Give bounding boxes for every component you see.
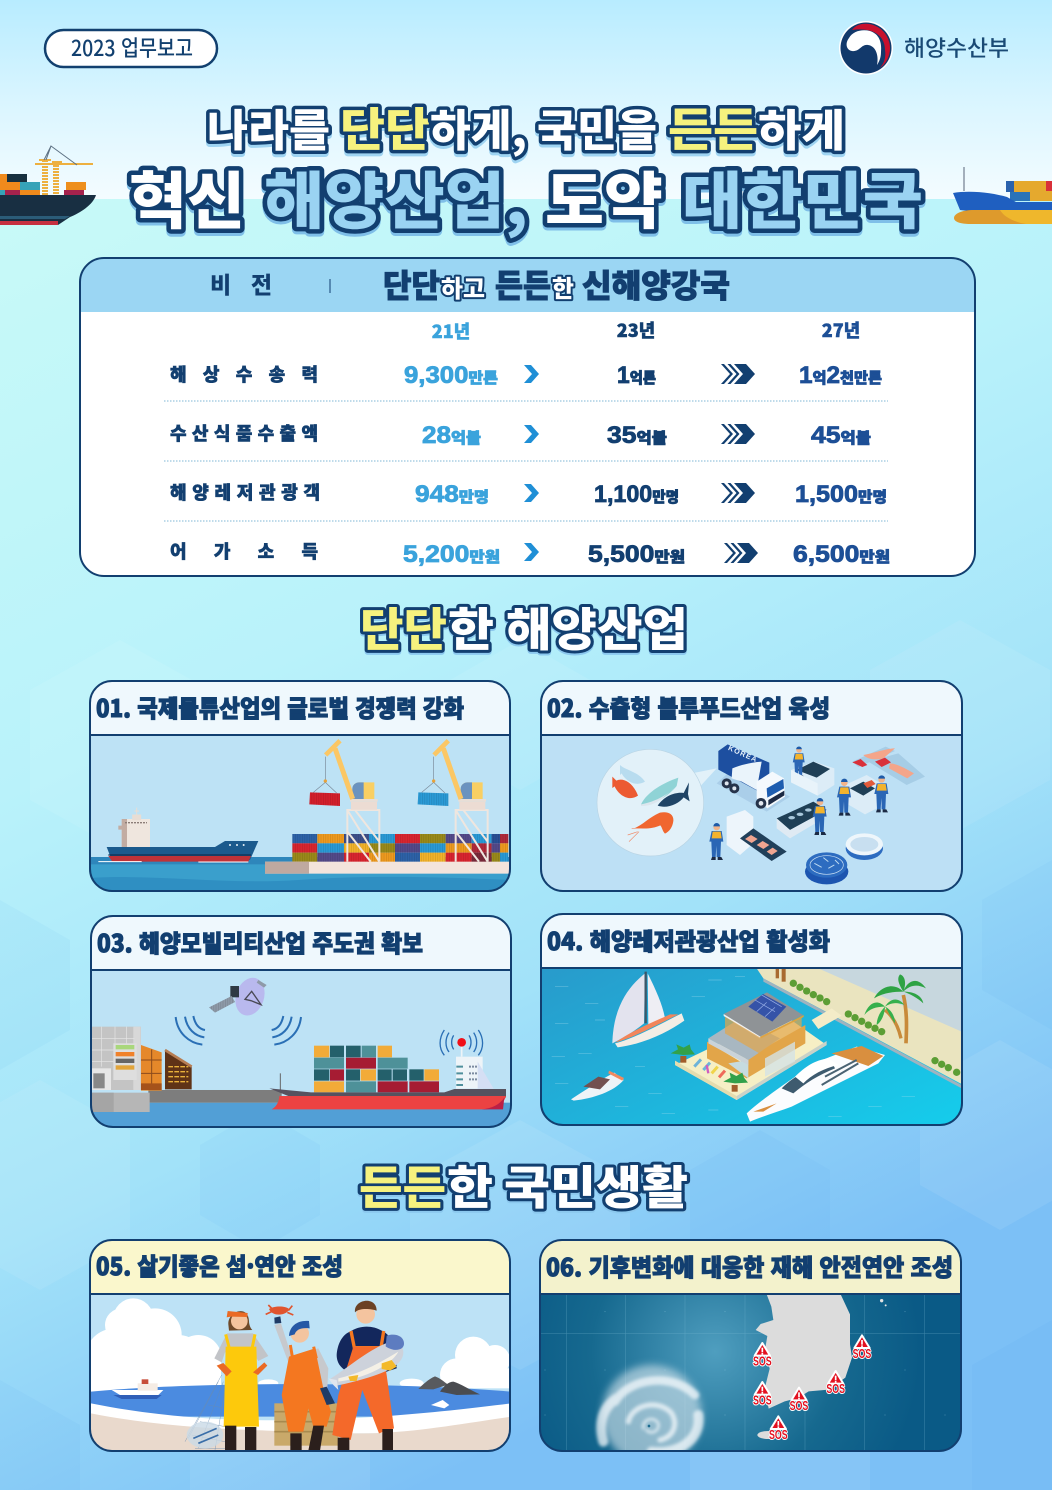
SOS markers: SOS (753, 1394, 772, 1408)
title: line 2: 대한민국 (682, 151, 923, 241)
fisher: man with crab (266, 1305, 338, 1451)
row: marine leisure tourists: 1,100만명 (594, 481, 679, 508)
badge: 2023 work report: 2023 업무보고 (71, 31, 193, 63)
row: marine leisure tourists: 해양레저관광객 (170, 479, 320, 505)
row: seafood exports: 45억불 (811, 422, 871, 449)
row: fishing household income: 어가소득 (170, 538, 318, 564)
table year headers: 23년 (617, 317, 655, 343)
title: line 2 (129, 151, 923, 241)
panel: vision (80, 258, 975, 576)
heading: reliable public life: 한 (447, 1152, 493, 1218)
SOS markers: SOS (826, 1382, 845, 1396)
heading: strong marine industry: 해양산업 (506, 594, 688, 660)
vision statement: 든든 (495, 261, 551, 307)
card 06 heading: 06. 기후변화에 대응한 재해 안전연안 조성 (546, 1248, 953, 1283)
fisher: woman in yellow (214, 1311, 268, 1451)
row: seafood exports: 35억불 (607, 422, 667, 449)
badge: 2023 work report (45, 30, 217, 67)
row: fishing household income: 6,500 만원 (793, 541, 890, 568)
vision statement: 단단 (383, 261, 440, 307)
card 02 heading: 02. 수출형 블루푸드산업 육성 (547, 689, 830, 724)
fisher: man with fish (328, 1301, 404, 1451)
row: seafood exports: 28억불 (422, 422, 481, 449)
title: line 2: 도약 (545, 151, 663, 241)
title: line 1: 국민을 (537, 95, 657, 159)
title: line 1: 나라를 (207, 95, 330, 159)
table year headers: 27년 (822, 317, 860, 343)
logo: ministry of oceans and fisheries (839, 21, 1009, 75)
heading: reliable public life (359, 1152, 688, 1218)
row: seafood exports (170, 420, 871, 449)
card 04 heading: 04. 해양레저관광산업 활성화 (547, 922, 830, 957)
illustration: floating house and yachts (552, 968, 963, 1122)
SOS markers (753, 1335, 871, 1442)
card 06: climate-safe coast (535, 1240, 975, 1465)
vision statement: 한 (552, 269, 574, 304)
SOS markers: SOS (769, 1428, 788, 1442)
title: line 1: 단단 (340, 94, 430, 160)
title: line 2: 혁신 (129, 151, 245, 241)
card 03: marine mobility (85, 916, 525, 1129)
row: marine leisure tourists: 1,500만명 (795, 481, 887, 508)
SOS markers: SOS (753, 1355, 772, 1369)
row: fishing household income: 5,500 만원 (588, 541, 685, 568)
title: line 1 (207, 94, 845, 160)
illustration: seafood processing: KOREA (727, 743, 759, 764)
card 01: global logistics (85, 681, 525, 894)
heading: strong marine industry: 단단 (360, 594, 447, 660)
vision statement: 신해양강국 (582, 261, 730, 307)
title: line 1: 하게, (430, 95, 527, 159)
SOS markers: SOS (790, 1399, 808, 1413)
row: marine leisure tourists: 948 만명 (415, 481, 489, 508)
card 05 heading: 05. 살기좋은 섬·연안 조성 (96, 1247, 343, 1282)
heading: strong marine industry (360, 594, 688, 660)
typhoon (601, 1365, 702, 1465)
illustration: fishers on the beach (85, 1298, 512, 1453)
vision label: 비전 (210, 266, 272, 300)
card 02: blue food (541, 681, 962, 891)
card 04: marine leisure (541, 914, 963, 1125)
title: line 1: 하게 (758, 95, 845, 159)
illustration: port with cranes and ship (85, 741, 525, 894)
title: line 1: 든든 (668, 94, 758, 160)
heading: reliable public life: 국민생활 (504, 1152, 688, 1218)
heading: strong marine industry: 한 (448, 594, 494, 660)
row: maritime transport capacity: 9,300 만톤 (404, 362, 498, 389)
vision statement: 하고 (441, 269, 485, 304)
illustration: seafood processing (597, 743, 925, 884)
card 03 heading: 03. 해양모빌리티산업 주도권 확보 (97, 924, 423, 959)
row: fishing household income (170, 538, 890, 568)
row: maritime transport capacity: 1억2천만톤 (799, 362, 882, 389)
card 01 heading: 01. 국제물류산업의 글로벌 경쟁력 강화 (96, 689, 464, 724)
illustration: container ship left (0, 146, 96, 225)
illustration: cargo ship right (953, 167, 1052, 224)
illustration: typhoon map of Korea (541, 1295, 960, 1450)
vision statement (383, 261, 730, 307)
title: line 2: 해양산업, (264, 151, 528, 241)
row: fishing household income: 5,200 만원 (403, 541, 500, 568)
row: maritime transport capacity (170, 361, 882, 389)
table year headers (432, 317, 860, 344)
row: marine leisure tourists (170, 479, 887, 508)
logo: ministry of oceans and fisheries: 해양수산부 (904, 31, 1009, 63)
heading: reliable public life: 든든 (359, 1152, 446, 1218)
SOS markers: SOS (853, 1347, 871, 1361)
card 05: livable islands and coasts (85, 1240, 512, 1453)
row: seafood exports: 수산식품수출액 (170, 420, 318, 446)
table year headers: 21년 (432, 318, 470, 344)
row: maritime transport capacity: 1억톤 (617, 362, 656, 389)
illustration: satellite, port and smart ship (85, 974, 525, 1129)
row: maritime transport capacity: 해상수송력 (170, 361, 318, 387)
